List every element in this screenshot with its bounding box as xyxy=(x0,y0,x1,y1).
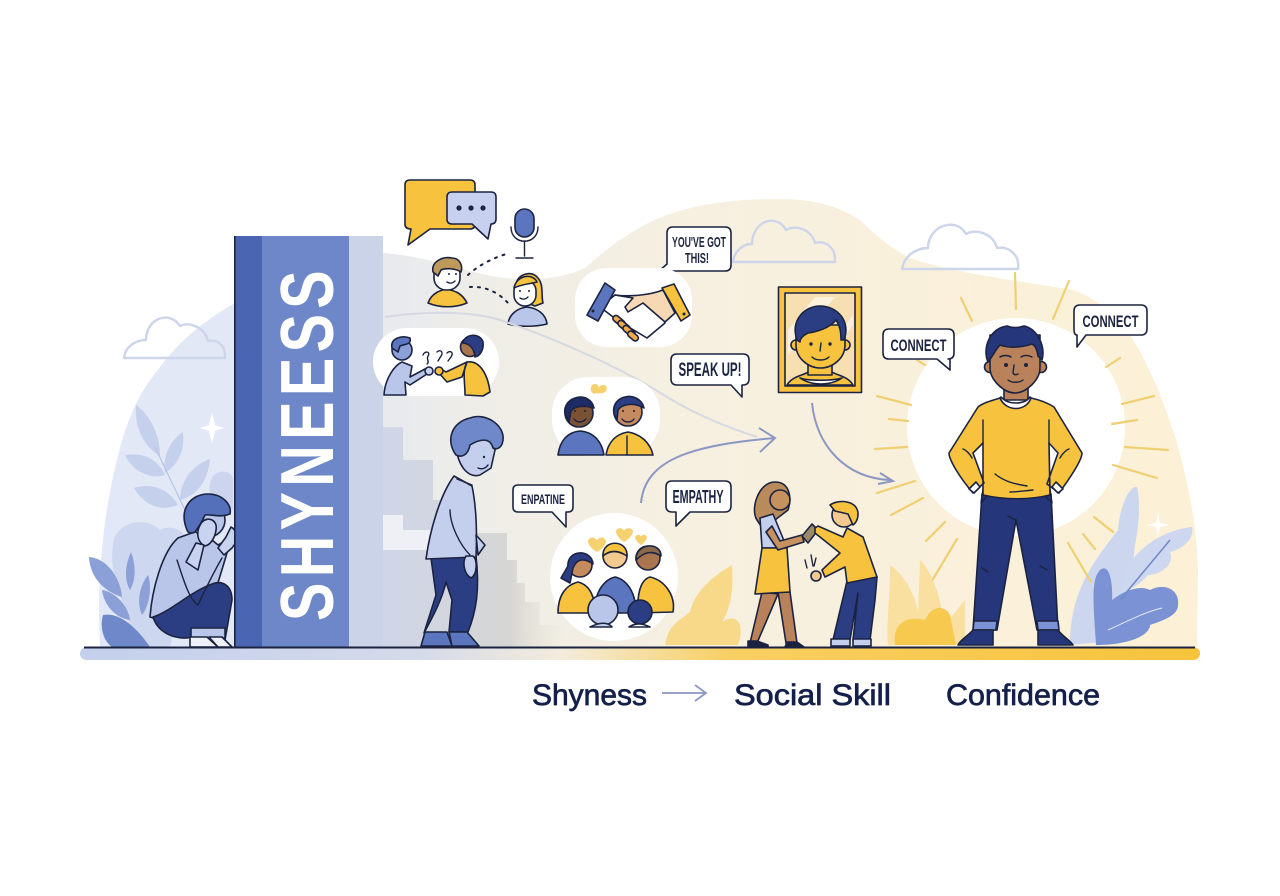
caption: social skill: Social Skill xyxy=(734,679,891,712)
speech bubble: you've got this xyxy=(657,227,731,273)
speech bubble: connect left xyxy=(883,329,954,370)
caption: confidence: Confidence xyxy=(946,679,1100,712)
arrow: curved up to the right xyxy=(641,428,775,503)
plant: yellow front of hero xyxy=(895,608,956,645)
plant: yellow right of couple xyxy=(887,560,965,645)
speech bubble: speak up xyxy=(671,354,749,397)
rays around confident figure xyxy=(875,273,1168,582)
framed portrait xyxy=(778,287,862,392)
background hill gradient xyxy=(99,199,1198,647)
speech bubble: connect right xyxy=(1074,305,1147,347)
arrow: caption xyxy=(662,685,706,701)
faint curved path xyxy=(385,313,757,437)
sparkle left xyxy=(200,412,224,444)
plant: pale blue left foliage xyxy=(112,405,233,647)
bubble: handshake icon xyxy=(575,268,692,347)
speech bubble: empathy: EMPATHY xyxy=(672,487,724,507)
speech bubble: enpatine: ENPATINE xyxy=(521,491,565,507)
figure: confident person xyxy=(949,326,1082,645)
pale step highlight xyxy=(383,515,433,550)
plant: pale blue right xyxy=(1070,487,1139,645)
stairs behind walking figure xyxy=(383,427,565,647)
figure: woman and man shaking hands xyxy=(748,482,877,647)
pillar with SHYNESS title xyxy=(234,236,383,647)
ground bar xyxy=(80,646,1200,660)
arrow: from portrait to confident figure xyxy=(812,403,893,484)
speech bubble: connect right: CONNECT xyxy=(1082,312,1139,331)
icon: speech bubbles with ellipsis xyxy=(405,180,496,245)
speech bubble: enpatine xyxy=(513,485,573,527)
cloud: middle xyxy=(733,221,835,262)
plant: dark blue left leaves xyxy=(89,552,150,647)
figure: walking shy person xyxy=(421,417,503,646)
bubble: two figures with question marks xyxy=(373,328,499,396)
bubble: group with hearts xyxy=(550,513,678,641)
bubble: two smiling friends xyxy=(552,377,660,456)
pillar title: SHYNEESS xyxy=(265,265,349,621)
figure: woman avatar xyxy=(508,274,547,326)
speech bubble: you've got this: YOU'VE GOT xyxy=(672,234,726,251)
speech bubble: you've got this: THIS! xyxy=(685,250,709,267)
white glow circle xyxy=(907,318,1125,536)
caption: shyness: Shyness xyxy=(532,679,647,712)
figure: man avatar xyxy=(428,258,467,307)
plant: right leaves xyxy=(1094,527,1192,645)
speech bubble: speak up: SPEAK UP! xyxy=(678,360,742,381)
cloud: left xyxy=(124,318,225,358)
speech bubble: empathy xyxy=(666,481,731,526)
plant: yellow center xyxy=(665,565,741,645)
icon: microphone xyxy=(511,209,538,258)
speech bubble: connect left: CONNECT xyxy=(890,336,947,355)
figure: crouching shy person xyxy=(150,494,236,647)
dotted connectors between people xyxy=(468,253,510,303)
sparkle right xyxy=(1146,512,1170,538)
cloud: right xyxy=(902,225,1018,269)
